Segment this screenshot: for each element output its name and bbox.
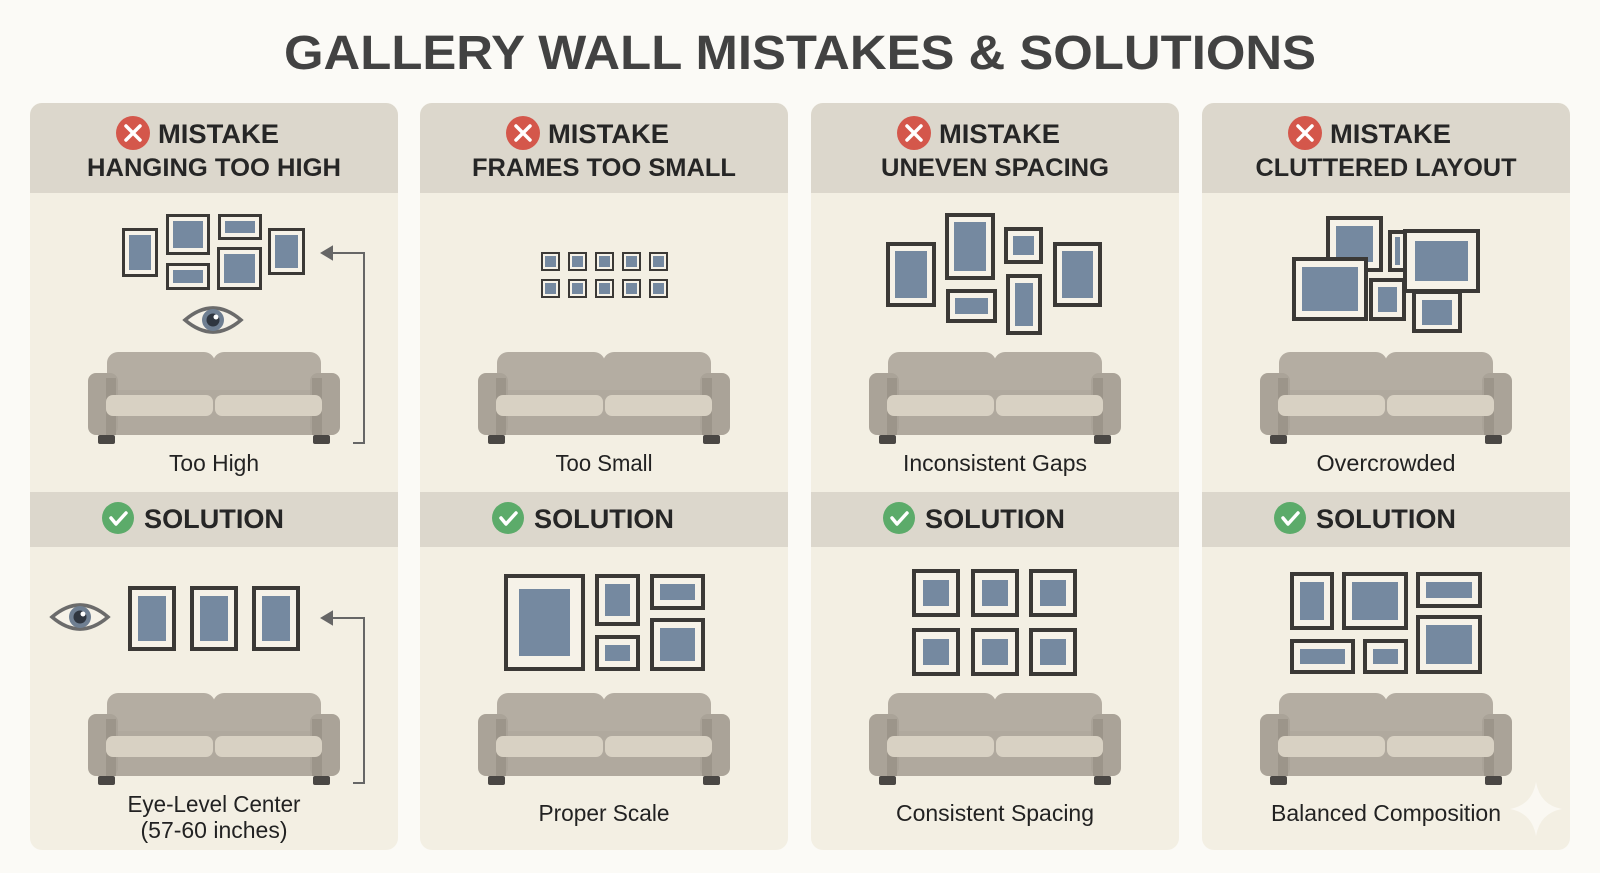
sofa: [478, 352, 730, 444]
label: Too Small: [556, 450, 652, 476]
panel: cluttered layout: [1202, 103, 1570, 850]
icon: sparkle: [1510, 782, 1562, 836]
label: Inconsistent Gaps: [903, 450, 1087, 476]
sofa: [88, 352, 340, 444]
solution header: [1202, 492, 1570, 547]
arrow: eye level: [322, 612, 364, 783]
title: GALLERY WALL MISTAKES & SOLUTIONS: [284, 27, 1316, 80]
mistake header: HANGING TOO HIGH: [87, 154, 341, 182]
sofa: [478, 693, 730, 785]
small frames: [541, 252, 668, 298]
mistake header: MISTAKE: [158, 119, 279, 149]
label: Balanced Composition: [1271, 800, 1501, 826]
mistake header: FRAMES TOO SMALL: [472, 154, 736, 182]
frames eye level: [128, 586, 300, 651]
solution header: [811, 492, 1179, 547]
label: [128, 791, 301, 843]
frames proper scale: [504, 574, 705, 671]
solution header: SOLUTION: [534, 504, 674, 534]
solution header: SOLUTION: [144, 504, 284, 534]
label: Too High: [169, 450, 259, 476]
solution header: [420, 492, 788, 547]
icon: eye: [185, 308, 241, 332]
icon: eye level: [52, 605, 108, 629]
sofa: [88, 693, 340, 785]
panel: hanging too high: [30, 103, 398, 850]
arrow: height: [322, 247, 364, 443]
uneven frames: [886, 213, 1102, 335]
mistake header: MISTAKE: [1330, 119, 1451, 149]
panel: frames too small: [420, 103, 788, 850]
balanced frames: [1290, 572, 1482, 674]
solution header: SOLUTION: [925, 504, 1065, 534]
label: Proper Scale: [538, 800, 670, 826]
mistake header: [30, 103, 398, 193]
sofa: [869, 693, 1121, 785]
solution header: SOLUTION: [1316, 504, 1456, 534]
mistake header: [420, 103, 788, 193]
label: Overcrowded: [1316, 450, 1456, 476]
sofa: [869, 352, 1121, 444]
frames too high: [122, 214, 305, 290]
mistake header: [811, 103, 1179, 193]
mistake header: CLUTTERED LAYOUT: [1256, 154, 1516, 182]
solution header: [30, 492, 398, 547]
sofa: [1260, 693, 1512, 785]
label: (57-60 inches): [140, 817, 288, 843]
panel: uneven spacing: [811, 103, 1179, 850]
grid frames: [912, 569, 1077, 676]
mistake header: MISTAKE: [548, 119, 669, 149]
label: Eye-Level Center: [128, 791, 301, 817]
sofa: [1260, 352, 1512, 444]
label: Consistent Spacing: [896, 800, 1094, 826]
mistake header: [1202, 103, 1570, 193]
cluttered frames: [1292, 216, 1480, 333]
mistake header: UNEVEN SPACING: [881, 154, 1109, 182]
mistake header: MISTAKE: [939, 119, 1060, 149]
